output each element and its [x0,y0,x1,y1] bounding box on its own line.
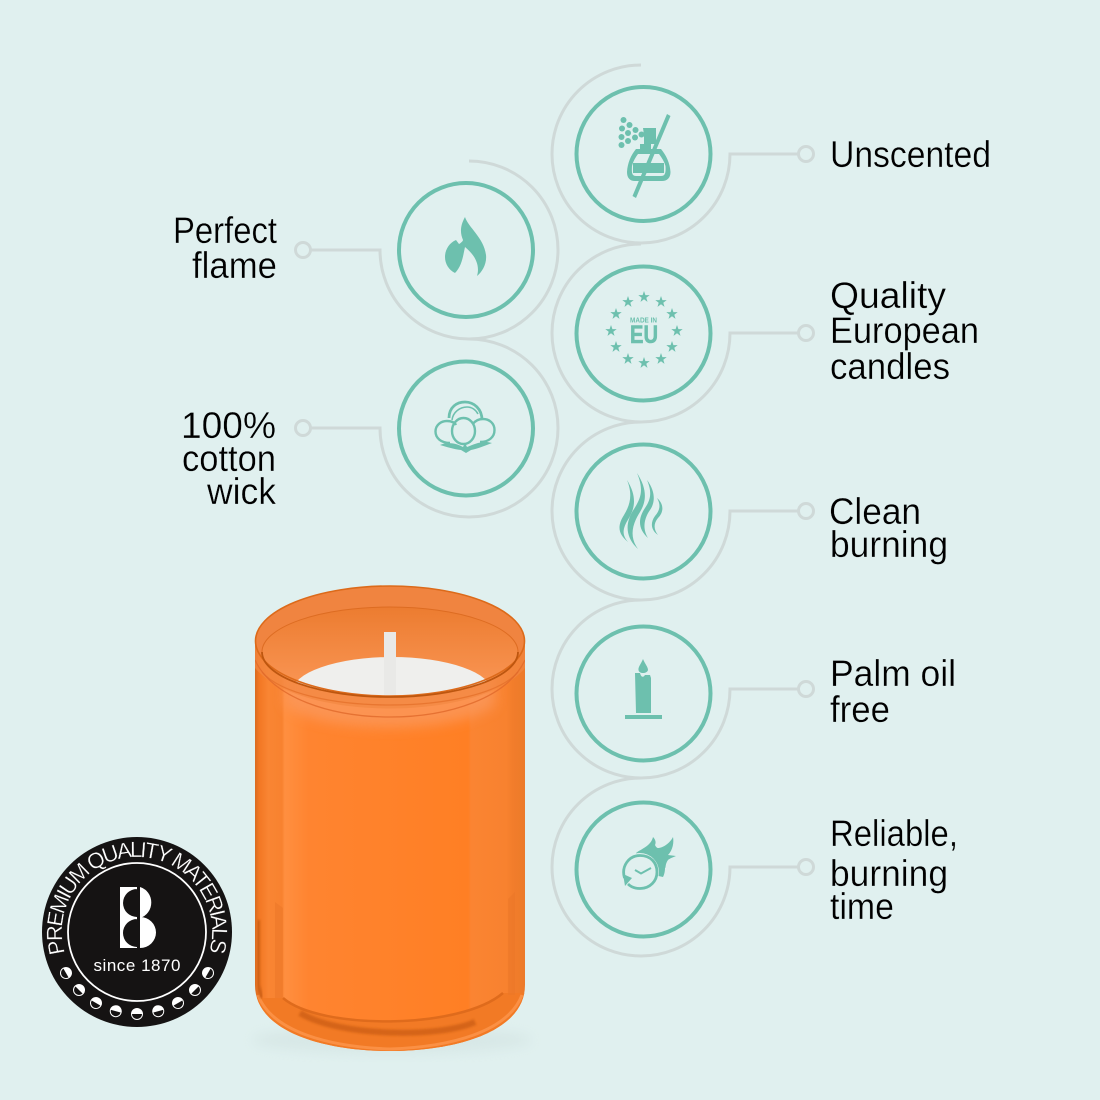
candle shadow [252,1026,532,1054]
rim band [255,646,525,732]
badge dots [58,965,216,1020]
label: Unscented: Unscented [830,134,991,175]
node: Unscented [798,146,814,162]
icon: clock with flame [621,837,676,891]
icon: made in EU stars [605,291,683,368]
node: Clean [798,504,814,518]
icon ring: Perfect flame [399,183,533,317]
icon ring: Unscented [576,87,710,221]
connector: Quality [552,244,798,422]
badge since text: since 1870 [94,956,180,975]
label: Palm oil free [830,653,956,730]
badge disc [42,837,232,1027]
badge: premium quality materials [42,837,232,1027]
icon: made in EU stars: EU [630,321,658,349]
label: Clean burning: burning [830,524,948,565]
wick [384,632,396,658]
icon ring: Palm [576,626,710,760]
icon ring: Quality [576,266,710,400]
icon: cotton boll [436,402,494,453]
feature: Clean burning [552,422,948,600]
candle [252,586,532,1060]
label: Palm oil free: Palm oil [830,653,956,694]
candle top rim [255,586,525,696]
icon ring: cotton [399,362,533,496]
feature: Reliable burning time [552,778,958,956]
label: 100% cotton wick: 100% [181,405,276,446]
icon: smoke waves [619,473,662,549]
feature: 100% cotton wick [181,339,558,517]
label: Clean burning [829,491,948,565]
candle body [255,640,525,1051]
candle interior [262,607,518,697]
label: Clean burning: Clean [829,491,921,532]
feature: Perfect flame [173,161,558,339]
label: Quality European candles: European [830,310,979,351]
feature: Quality European candles [552,244,979,422]
connector: Unscented [552,65,798,243]
label: Quality European candles: Quality [830,275,947,316]
label: Reliable burning time [830,813,958,927]
label: Palm oil free: free [830,689,890,730]
infographic [42,64,989,1051]
badge B monogram [120,887,156,948]
feature: Unscented [552,65,991,243]
node: Perfect flame [296,242,310,258]
connector: Reliable [552,778,798,956]
label: Reliable burning time: time [830,886,894,927]
icon: crossed out perfume bottle [618,114,670,198]
node: Quality [798,326,814,340]
label: Perfect flame: Perfect [173,210,278,251]
connector: Perfect flame [311,161,558,339]
icon: flame [445,217,486,276]
connector: Palm [552,600,798,778]
bottom base bands [256,919,524,1051]
badge ring [68,863,206,1001]
connector: Clean [552,422,798,600]
label: Perfect flame [173,210,278,286]
label: Reliable burning time: Reliable, [830,813,958,854]
icon: candle [625,659,662,719]
label: Perfect flame: flame [192,245,277,286]
feature: Palm oil free [552,600,956,778]
icon: made in EU stars: MADE IN [630,318,657,324]
node: cotton [296,420,310,436]
node: Palm [798,682,814,696]
node: Reliable [798,860,814,874]
label: Quality European candles: candles [830,346,950,387]
label: Quality European candles [830,275,979,387]
badge curved text: PREMIUM QUALITY MATERIALS [46,842,228,954]
label: 100% cotton wick [181,405,276,512]
rim outlines [256,586,524,697]
icon ring: Reliable [576,802,710,936]
label: 100% cotton wick: wick [206,471,276,512]
connector: cotton [311,339,558,517]
label: 100% cotton wick: cotton [182,438,276,479]
label: Reliable burning time: burning [830,853,948,894]
icon ring: Clean [576,444,710,578]
wax [296,632,486,696]
